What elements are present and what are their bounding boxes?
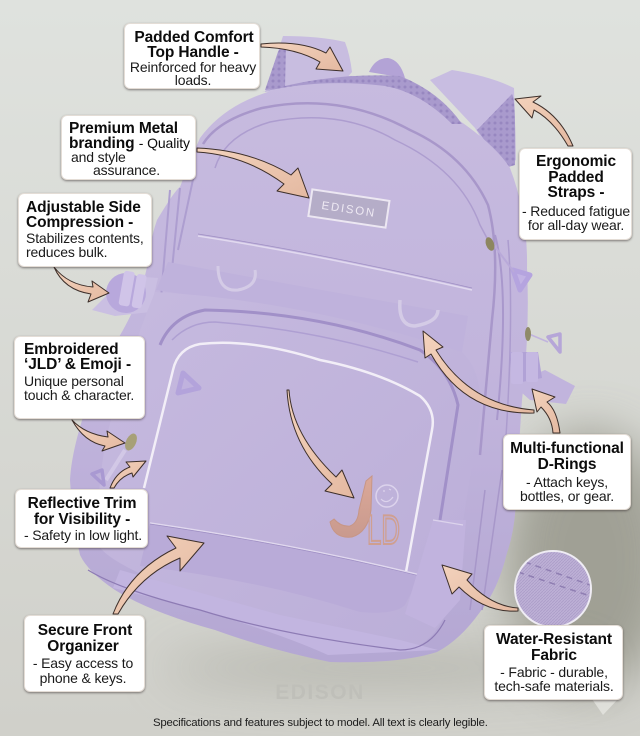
arrow: straps <box>515 96 573 146</box>
side compression strap left <box>92 270 158 316</box>
right shoulder strap <box>430 70 516 170</box>
callout: secure front organizer: phone & keys. <box>40 670 126 686</box>
d-ring right <box>400 300 438 326</box>
triangle pull on pocket <box>178 373 199 393</box>
callout: ergonomic padded straps: - Reduced fatigue <box>522 203 630 219</box>
callout: premium metal branding: and style <box>71 149 126 165</box>
metal brand label: EDISON <box>321 200 377 220</box>
callout: ergonomic padded straps: for all-day wear. <box>528 217 624 233</box>
callout: embroidered JLD and emoji: Unique personal <box>24 373 124 389</box>
callout: secure front organizer: Secure Front <box>38 622 132 639</box>
arrow: metal branding <box>197 148 309 198</box>
callout: premium metal branding: Premium Metal <box>69 120 178 137</box>
callout: water-resistant fabric <box>484 625 623 700</box>
callout: padded comfort top handle <box>124 23 260 89</box>
callout: reflective trim: - Safety in low light. <box>24 527 142 543</box>
callout: water-resistant fabric: Fabric <box>531 647 577 664</box>
callout: secure front organizer: - Easy access to <box>33 655 133 671</box>
callout: premium metal branding: assurance. <box>93 162 160 178</box>
triangle zip pull right <box>484 236 530 290</box>
upper compartment <box>160 103 511 480</box>
callout: adjustable side compression: Stabilizes contents, <box>26 230 144 246</box>
callout: embroidered JLD and emoji: ‘JLD’ & Emoji - <box>24 356 131 373</box>
callout: water-resistant fabric: - Fabric - durable, <box>500 664 608 680</box>
arrow: side compression <box>54 267 109 302</box>
callout: ergonomic padded straps <box>519 148 632 240</box>
callout: multi-functional d-rings <box>503 434 631 510</box>
callout: ergonomic padded straps: Straps - <box>548 184 604 201</box>
callout: premium metal branding: branding - Quality <box>69 135 190 152</box>
pocket zipper <box>160 310 458 520</box>
callout: embroidered JLD and emoji: touch & character. <box>24 387 134 403</box>
callout: padded comfort top handle: Padded Comfort <box>134 29 254 46</box>
arrow: JLD logo <box>287 390 354 498</box>
callout: premium metal branding <box>61 115 196 180</box>
callout: ergonomic padded straps: Ergonomic <box>536 153 616 170</box>
white reflective trim <box>144 343 433 572</box>
callout: padded comfort top handle: Top Handle - <box>147 44 239 61</box>
callout: secure front organizer <box>24 615 145 692</box>
callout: adjustable side compression: Adjustable Side <box>26 199 141 216</box>
backpack body <box>70 76 528 662</box>
pocket flap band <box>156 262 468 352</box>
callout: embroidered JLD and emoji: Embroidered <box>24 341 119 358</box>
arrow: top handle <box>261 43 343 71</box>
callout: adjustable side compression: reduces bulk. <box>26 244 107 260</box>
callout: secure front organizer: Organizer <box>47 638 119 655</box>
lower seam and organizer band <box>88 470 502 655</box>
callout: reflective trim <box>15 489 148 548</box>
callout: adjustable side compression <box>18 193 152 267</box>
mesh top band <box>262 75 462 124</box>
arrow: embroidered <box>72 420 125 451</box>
arrows <box>54 43 573 614</box>
callout: multi-functional d-rings: Multi-functional <box>510 440 624 457</box>
zipper pull left <box>92 432 139 485</box>
callout: padded comfort top handle: loads. <box>175 72 211 88</box>
metal brand label <box>308 189 389 228</box>
callout: padded comfort top handle: Reinforced for heavy <box>130 59 256 75</box>
callout: reflective trim: Reflective Trim <box>28 495 136 512</box>
callout: ergonomic padded straps: Padded <box>548 169 604 186</box>
callout: multi-functional d-rings: D-Rings <box>538 456 596 473</box>
d-ring left <box>218 266 255 290</box>
sparkle <box>592 699 618 715</box>
arrow: d-ring right <box>532 389 560 433</box>
callout: embroidered JLD and emoji <box>14 336 145 419</box>
callout: reflective trim: for Visibility - <box>34 511 130 528</box>
arrow: d-ring left <box>423 331 534 413</box>
top handle and back panel <box>265 36 405 92</box>
arrow: front organizer <box>113 536 204 614</box>
fabric detail circle <box>515 551 591 627</box>
callout: adjustable side compression: Compression - <box>26 214 133 231</box>
callout: multi-functional d-rings: bottles, or gear. <box>520 488 614 504</box>
embroidered JLD logo: LD <box>367 506 400 553</box>
watermark: EDISON <box>275 681 365 704</box>
callout: water-resistant fabric: Water-Resistant <box>496 631 612 648</box>
callout: water-resistant fabric: tech-safe materials. <box>494 678 614 694</box>
zip pull side <box>525 327 560 352</box>
embroidered JLD logo <box>330 476 400 553</box>
arrow: fabric <box>442 565 518 611</box>
side compression strap right <box>510 352 575 404</box>
arrow: reflective trim <box>110 461 146 488</box>
footer note: Specifications and features subject to model. All text is clearly legible. <box>153 717 488 729</box>
callout: multi-functional d-rings: - Attach keys, <box>526 474 608 490</box>
